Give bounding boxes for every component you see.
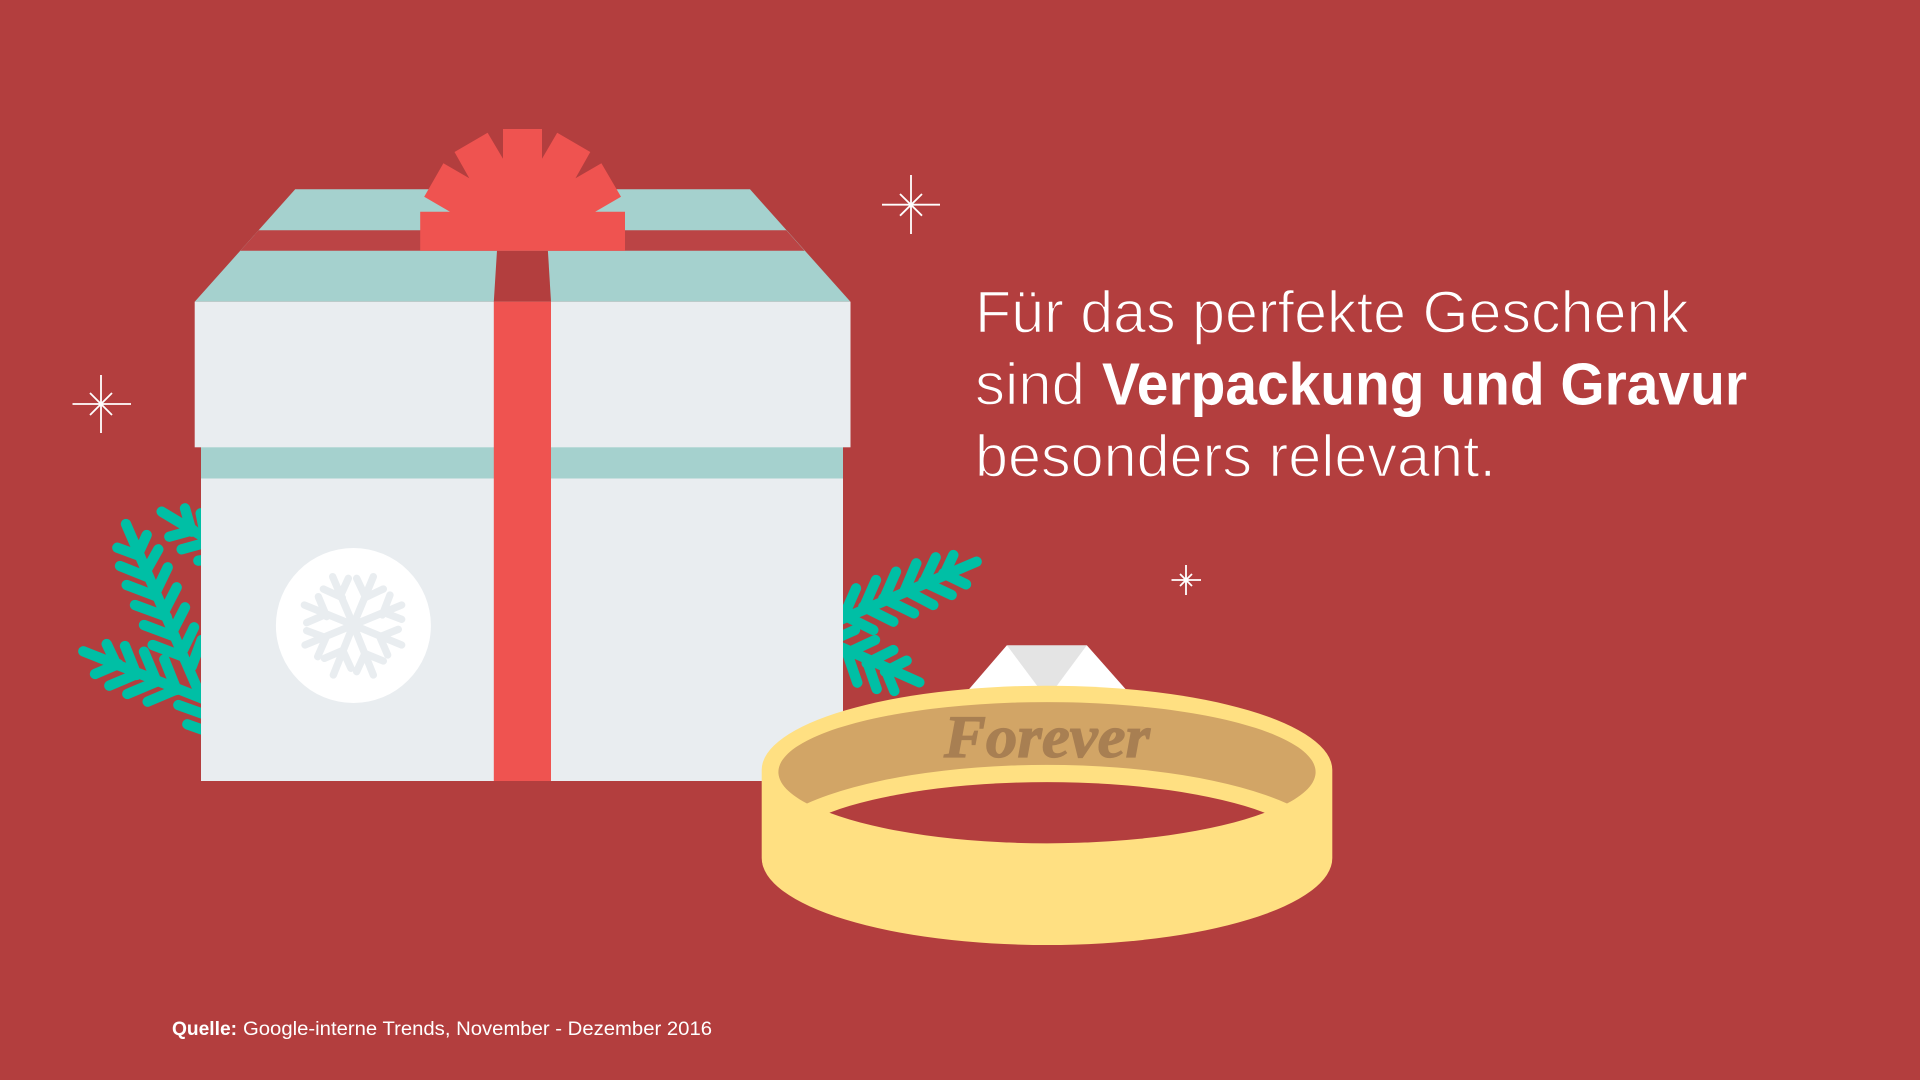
icon: pine branch right [840,555,977,691]
engraving: Forever [943,704,1151,770]
ring inner surface [778,702,1316,804]
source note: Quelle: [172,1018,237,1040]
heading line 2: sind [975,351,1085,417]
snowflake badge [276,548,431,703]
lid top [195,189,850,302]
heading line 2: Verpackung und Gravur [1102,351,1747,417]
diamond [964,645,1131,695]
icon: snowflake [304,577,402,675]
ribbon band across lid [240,230,805,251]
ring band [762,686,1332,945]
ribbon gap on lid [494,251,551,302]
gift box [195,129,850,781]
box shadow band [201,447,843,478]
box body [201,447,843,781]
heading [975,279,1747,490]
icon: pine branch left [83,508,203,730]
heading line 1: Für das perfekte Geschenk [975,279,1689,345]
sparkle small [1172,565,1201,595]
bow [420,129,625,251]
source note: Google-interne Trends, November - Dezember 2016 [243,1018,712,1040]
heading line 3: besonders relevant. [975,424,1496,490]
sparkle top [882,175,940,234]
lid front [195,302,850,447]
ring [762,645,1332,945]
ring hole [829,782,1265,843]
ribbon vertical [494,302,551,781]
sparkle left [72,375,131,433]
